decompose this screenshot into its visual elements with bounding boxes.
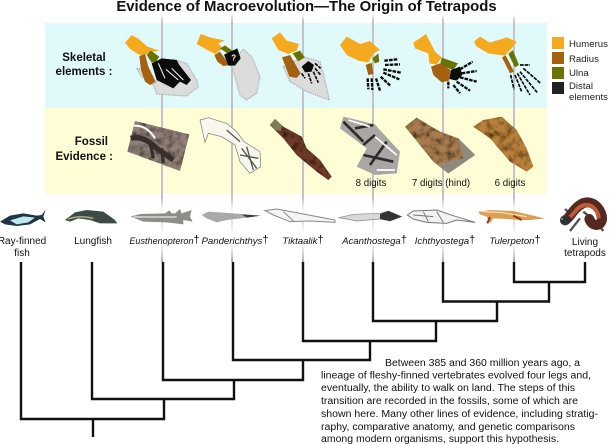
- legend: Distal: [569, 81, 593, 92]
- panel: fossil evidence background: [45, 108, 547, 194]
- fossil: Ichthyostega: [405, 118, 475, 173]
- legend: [552, 37, 608, 103]
- text block: explanation paragraph: transition are recorded in the fossils, some of which are: [321, 396, 578, 407]
- taxon label: Eusthenopteron: Eusthenopteron†: [129, 234, 200, 246]
- animal: Tulerpeton: [478, 210, 545, 223]
- fossil: Panderichthys: [200, 118, 261, 173]
- heading: skeletal elements: [56, 52, 112, 78]
- text block: explanation paragraph: raphy, comparative anatomy, and genetic comparisons: [321, 422, 575, 433]
- legend: Radius: [569, 54, 599, 65]
- skeleton: Acanthostega: [340, 37, 401, 91]
- fossil: Eusthenopteron: [127, 121, 189, 171]
- animal: lungfish: [65, 210, 117, 223]
- animals, right group: [338, 210, 545, 223]
- heading: skeletal elements: Skeletal: [62, 52, 106, 64]
- taxon label: ray-finned fish: fish: [14, 248, 30, 259]
- fossils, left group: [127, 118, 332, 180]
- taxon label: Panderichthys: Panderichthys†: [202, 234, 268, 247]
- legend: Humerus: [569, 39, 608, 50]
- text block: explanation paragraph: eventually, the ability to walk on land. The steps of this: [321, 383, 575, 394]
- taxon guide lines: [161, 14, 515, 262]
- skeleton: Tulerpeton: [474, 37, 541, 95]
- animal: Eusthenopteron: [131, 209, 193, 224]
- text block: explanation paragraph: Between 385 and 360 million years ago, a: [385, 358, 580, 369]
- taxon label: ray-finned fish: [0, 236, 46, 259]
- skeletal diagrams, right group: [340, 34, 541, 95]
- fossils, right group: [340, 117, 533, 175]
- skeleton: Eusthenopteron: [125, 35, 198, 96]
- heading: skeletal elements: elements :: [56, 66, 112, 78]
- text block: explanation paragraph: shown here. Many other lines of evidence, including stratig-: [321, 409, 598, 420]
- text block: explanation paragraph: [321, 358, 598, 444]
- taxon label: living tetrapods: [564, 237, 606, 259]
- heading: fossil evidence: [55, 136, 113, 163]
- skeleton: Panderichthys: [197, 34, 260, 100]
- fossil: Tiktaalik: [270, 119, 332, 180]
- animal: Acanthostega: [338, 211, 402, 221]
- taxon label: living tetrapods: Living: [572, 237, 598, 248]
- digit label: 7 digits: 7 digits (hind): [412, 178, 470, 189]
- fossil: Tulerpeton: [473, 117, 533, 172]
- heading: fossil evidence: Fossil: [75, 136, 108, 148]
- animal: living salamander: [560, 202, 603, 231]
- phylogenetic tree: [21, 262, 585, 437]
- taxon label: Ichthyostega: Ichthyostega†: [415, 234, 475, 247]
- fossil: Acanthostega: [340, 117, 400, 175]
- digit label: 6 digits: 6 digits: [495, 178, 525, 189]
- legend: Ulna: [569, 68, 589, 79]
- animal: ray-finned fish: [0, 210, 46, 226]
- taxon label: Tulerpeton: Tulerpeton†: [489, 234, 541, 247]
- taxon label: Acanthostega: Acanthostega†: [341, 234, 407, 247]
- taxon label: Tiktaalik: Tiktaalik†: [282, 234, 324, 247]
- skeletal diagrams, left group: [125, 32, 329, 100]
- skeleton: Ichthyostega: [413, 34, 477, 93]
- taxon label: living tetrapods: tetrapods: [564, 248, 606, 259]
- animal: Panderichthys: [202, 212, 261, 222]
- digit label: 8 digits: 8 digits: [356, 178, 386, 189]
- panel: skeletal elements background: [45, 23, 547, 108]
- legend: elements: [569, 92, 608, 103]
- text block: explanation paragraph: lineage of fleshy-finned vertebrates evolved four legs and,: [321, 370, 591, 382]
- animal: Ichthyostega: [407, 210, 475, 223]
- taxon label: lungfish: Lungfish: [74, 236, 112, 247]
- skeleton: Panderichthys: ?: [231, 54, 236, 63]
- skeleton: Tiktaalik: [272, 32, 329, 100]
- heading: fossil evidence: Evidence :: [55, 151, 113, 163]
- animal: Tiktaalik: [265, 209, 335, 222]
- animals, left group: [0, 209, 335, 226]
